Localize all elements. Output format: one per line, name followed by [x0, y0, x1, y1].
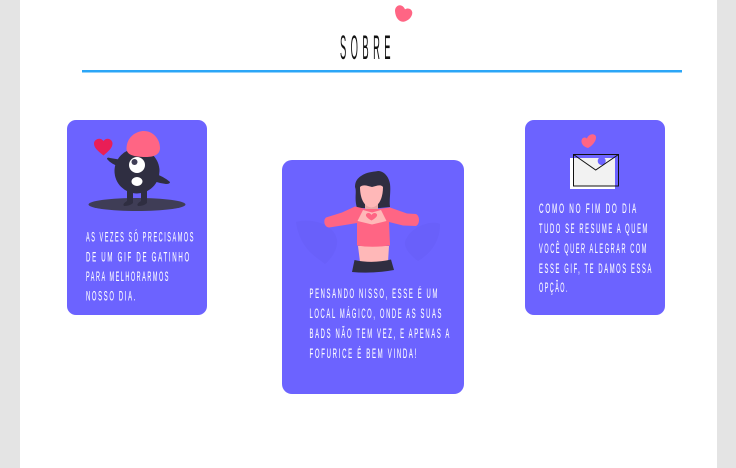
page illustration: PENSANDO NISSO, ESSE É UM: [310, 285, 439, 302]
illustration: monster: [88, 131, 186, 211]
page illustration: DE UM GIF DE GATINHO: [86, 250, 191, 266]
text: centre card: FOFURICE É BEM VINDA!: [310, 345, 418, 362]
text: left card: [86, 228, 195, 304]
page illustration: BADS NÃO TEM VEZ, E APENAS A: [310, 325, 451, 342]
panel: centre card: [282, 160, 464, 394]
page illustration: LOCAL MÁGICO, ONDE AS SUAS: [310, 305, 443, 322]
page illustration: AS VEZES SÓ PRECISAMOS: [86, 228, 195, 246]
panel: left card: [67, 120, 207, 315]
decorative faint wings: [296, 221, 440, 264]
icon: top heart: [395, 5, 412, 22]
icon: small heart: [581, 134, 596, 148]
page illustration: SOBRE: [340, 29, 395, 67]
text: left card: NOSSO DIA.: [86, 288, 137, 304]
icon: envelope: [570, 154, 618, 189]
text: centre card: [310, 285, 451, 362]
panel: right card: [525, 120, 665, 315]
heading underline: [82, 70, 682, 72]
illustration: woman making a heart with her hands: [324, 171, 419, 273]
text: left card: PARA MELHORARMOS: [86, 269, 170, 285]
text: right card: OPÇÃO.: [539, 279, 569, 296]
text: right card: [539, 201, 653, 296]
icon: red heart: [94, 139, 112, 156]
